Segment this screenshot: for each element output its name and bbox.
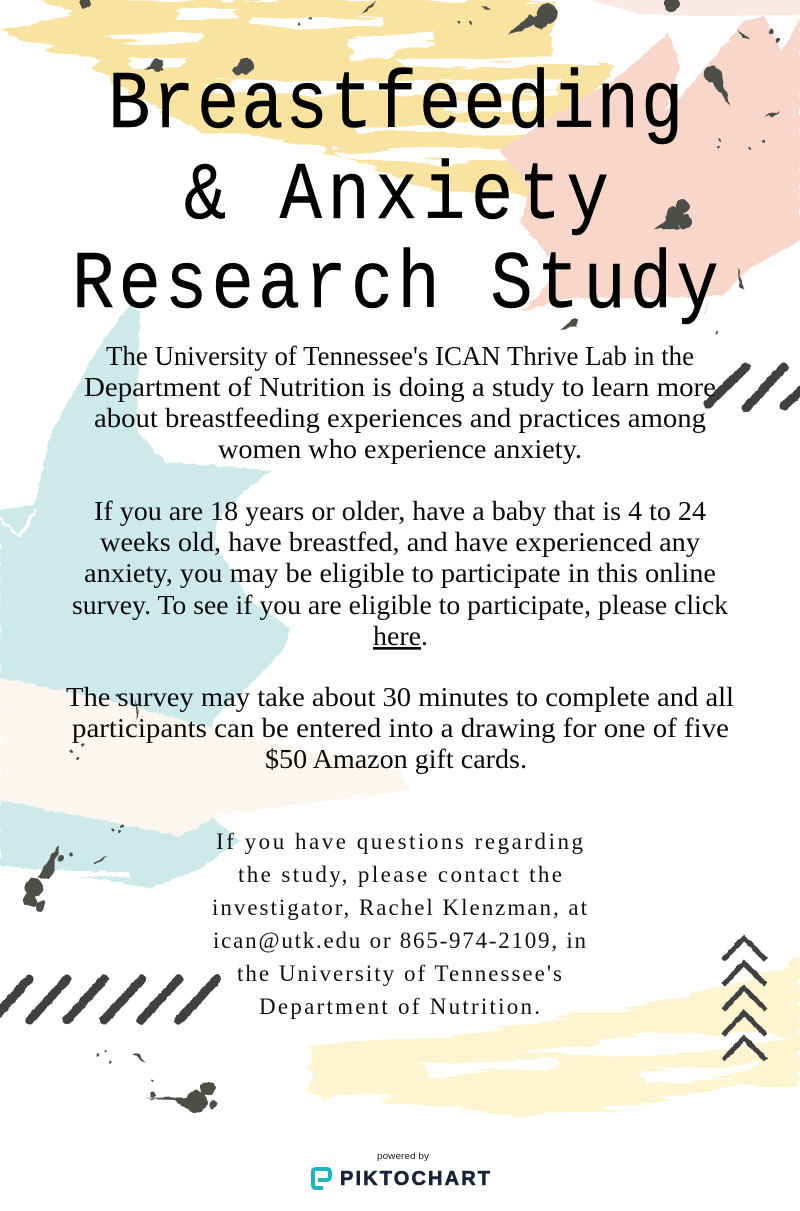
text block: eligibility: If you are 18 years or older, have a baby that is 4 to 24 bbox=[94, 496, 707, 526]
background: pale yellow brush stroke bbox=[310, 958, 800, 1115]
text block: contact information: ican@utk.edu or 865-974-2109, in bbox=[213, 928, 586, 953]
text block: contact information: Department of Nutrition. bbox=[259, 994, 540, 1019]
text block: survey incentive bbox=[66, 682, 734, 774]
text block: survey incentive: participants can be entered into a drawing for one of five bbox=[72, 713, 729, 743]
text block: eligibility bbox=[72, 496, 729, 651]
background: teal brush stroke bbox=[0, 305, 290, 888]
title: & Anxiety bbox=[184, 149, 609, 243]
text block: eligibility: anxiety, you may be eligible to participate in this online bbox=[84, 558, 716, 588]
diagonal dashes: bottom left bbox=[0, 979, 217, 1020]
text block: study introduction: The University of Tennessee's ICAN Thrive Lab in the bbox=[106, 341, 694, 371]
title: Breastfeeding bbox=[108, 58, 683, 152]
text block: contact information bbox=[212, 829, 588, 1019]
logo: powered by Piktochart: powered by bbox=[377, 1151, 429, 1162]
text block: eligibility: here. bbox=[373, 621, 428, 651]
logo: powered by Piktochart bbox=[313, 1151, 490, 1190]
text block: study introduction bbox=[84, 341, 716, 464]
text block: study introduction: about breastfeeding experiences and practices among bbox=[94, 403, 706, 433]
text block: contact information: investigator, Rachel Klenzman, at bbox=[212, 895, 588, 920]
title: Research Study bbox=[72, 238, 719, 332]
text block: eligibility: survey. To see if you are eligible to participate, please click bbox=[72, 590, 729, 620]
title bbox=[72, 58, 719, 332]
background: cream brush stroke bbox=[0, 678, 410, 836]
chevrons arrow bbox=[723, 938, 766, 1060]
diagonal dashes: top right bbox=[708, 367, 800, 408]
logo: powered by Piktochart: PIKTOCHART bbox=[340, 1168, 490, 1190]
text block: contact information: the University of Tennessee's bbox=[237, 961, 562, 986]
text block: survey incentive: The survey may take about 30 minutes to complete and all bbox=[66, 682, 734, 712]
background: pale pink strip bbox=[590, 0, 800, 16]
background: yellow brush stroke bbox=[0, 0, 612, 197]
text block: contact information: the study, please contact the bbox=[238, 862, 562, 887]
text block: eligibility: weeks old, have breastfed, and have experienced any bbox=[100, 527, 701, 557]
text block: contact information: If you have questions regarding bbox=[216, 829, 584, 854]
background: pink brush stroke bbox=[500, 17, 800, 312]
text block: survey incentive: $50 Amazon gift cards. bbox=[265, 744, 527, 774]
text block: study introduction: Department of Nutrition is doing a study to learn more bbox=[84, 372, 716, 402]
text block: study introduction: women who experience anxiety. bbox=[218, 434, 582, 464]
